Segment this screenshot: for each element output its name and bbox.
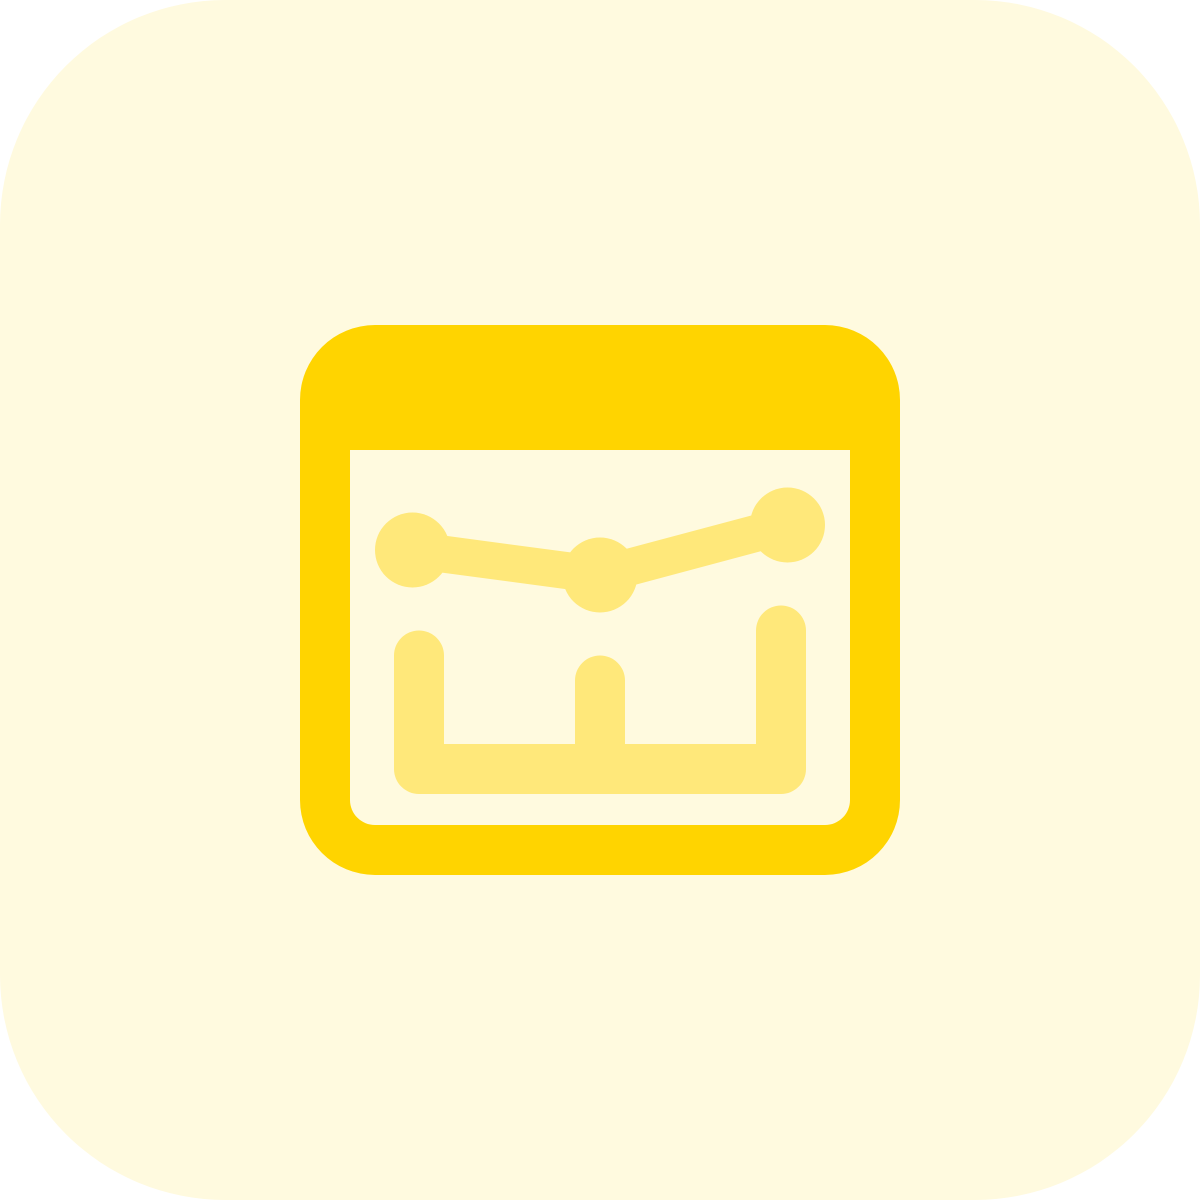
- line chart with data points: [375, 488, 825, 612]
- browser window frame: [300, 325, 900, 875]
- bar chart axis with three bars: [394, 606, 806, 794]
